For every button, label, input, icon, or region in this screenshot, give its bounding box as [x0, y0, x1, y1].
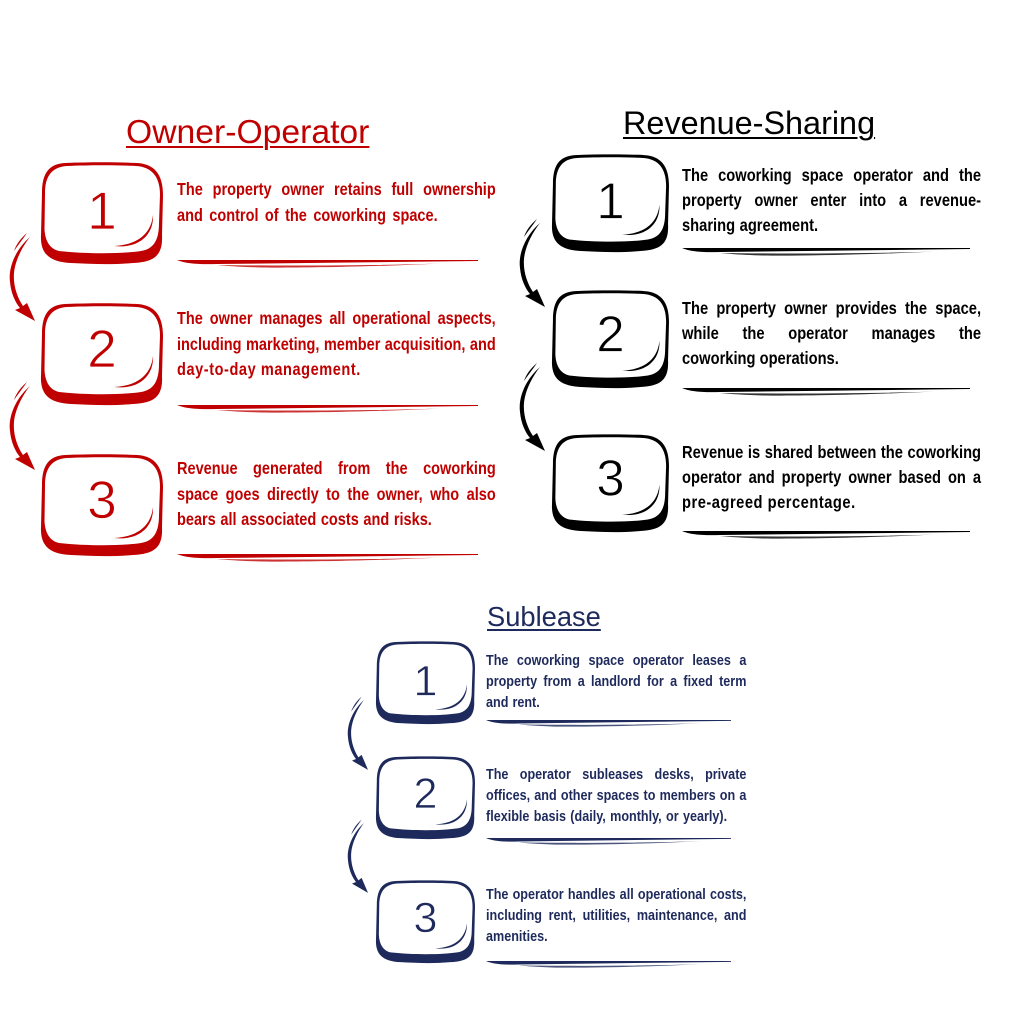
step 3: Sublease	[376, 880, 746, 968]
step 1: Owner-Operator	[40, 162, 496, 268]
text: step 2 description: flexible basis (daily, monthly, or yearly).	[486, 808, 727, 824]
icon: number badge 1: 1	[414, 658, 437, 706]
text: step 2 description	[486, 766, 746, 824]
arrow: step 1 to step 2	[348, 696, 368, 770]
arrow: step 2 to step 3	[364, 823, 380, 892]
text: step 3 description: space goes directly to the owner, who also	[177, 484, 496, 504]
text: step 3 description	[486, 884, 746, 946]
step 3: Owner-Operator	[40, 454, 496, 562]
text: step 3 description: operator and property owner based on a	[682, 466, 981, 486]
panel: Revenue-Sharing	[520, 105, 982, 539]
underline stroke	[682, 531, 970, 539]
underline stroke	[177, 405, 478, 413]
text: step 1 description: and control of the coworking space.	[177, 204, 438, 224]
text: step 2 description: while the operator manages the	[682, 322, 981, 342]
text: step 3 description	[682, 442, 982, 512]
icon: number badge 1: 1	[87, 182, 117, 241]
text: step 3 description: The operator handles all operational costs,	[486, 886, 746, 902]
step 2: Owner-Operator	[40, 303, 496, 413]
text: step 1 description: The property owner retains full ownership	[177, 179, 496, 199]
icon: number badge 1	[552, 154, 669, 252]
text: step 2 description: including marketing, member acquisition, and	[177, 334, 496, 354]
text: step 2 description	[682, 298, 981, 368]
text: step 2 description: The operator subleases desks, private	[486, 766, 746, 782]
text: step 1 description	[682, 164, 981, 234]
underline stroke	[177, 554, 478, 562]
icon: number badge 1: 1	[596, 172, 625, 229]
step 2: Sublease	[376, 756, 746, 845]
text: step 1 description: The coworking space operator leases a	[486, 652, 746, 668]
icon: number badge 1	[40, 162, 163, 264]
text: step 3 description: including rent, utilities, maintenance, and	[486, 906, 746, 924]
text: step 1 description	[177, 179, 496, 224]
icon: number badge 3	[40, 454, 163, 556]
text: step 1 description	[486, 652, 746, 710]
step 2: Revenue-Sharing	[552, 290, 981, 396]
underline stroke	[177, 260, 478, 268]
step 3: Revenue-Sharing	[552, 434, 982, 539]
arrow: step 1 to step 2	[10, 233, 35, 321]
text: step 3 description: pre-agreed percentage.	[682, 492, 856, 512]
heading: Sublease: Sublease	[487, 601, 601, 632]
text: step 3 description: Revenue generated from the coworking	[177, 458, 496, 478]
icon: number badge 3	[376, 880, 475, 964]
icon: number badge 3: 3	[596, 449, 625, 506]
underline stroke	[486, 838, 731, 845]
text: step 3 description: Revenue is shared between the coworking	[682, 442, 981, 462]
underline stroke	[682, 388, 970, 396]
arrow: step 2 to step 3	[520, 363, 545, 451]
text: step 1 description: sharing agreement.	[682, 214, 818, 234]
panel: Sublease	[348, 601, 746, 968]
icon: number badge 1	[376, 641, 475, 724]
arrow: step 1 to step 2	[520, 219, 545, 307]
text: step 3 description: bears all associated costs and risks.	[177, 509, 432, 529]
text: step 3 description: amenities.	[486, 928, 548, 944]
text: step 1 description: property owner enter into a revenue-	[682, 190, 981, 210]
icon: number badge 3: 3	[414, 894, 437, 942]
underline stroke	[682, 248, 970, 256]
text: step 2 description: coworking operations.	[682, 348, 839, 368]
icon: number badge 3	[552, 434, 669, 532]
icon: number badge 2	[40, 303, 163, 406]
text: step 1 description: property from a landlord for a fixed term	[486, 672, 746, 690]
arrow: step 2 to step 3	[10, 382, 35, 470]
icon: number badge 3: 3	[87, 471, 117, 530]
text: step 2 description: The owner manages all operational aspects,	[177, 308, 496, 328]
heading: Revenue-Sharing: Revenue-Sharing	[623, 105, 875, 141]
underline stroke	[486, 961, 731, 968]
text: step 1 description: and rent.	[486, 694, 540, 710]
panel: Owner-Operator	[10, 113, 496, 562]
icon: number badge 2: 2	[87, 320, 117, 379]
icon: number badge 2	[552, 290, 669, 388]
text: step 2 description: day-to-day management.	[177, 359, 361, 379]
text: step 2 description: The property owner provides the space,	[682, 298, 981, 318]
text: step 2 description: offices, and other spaces to members on a	[486, 786, 746, 804]
step 1: Revenue-Sharing	[552, 154, 981, 256]
underline stroke	[486, 720, 731, 727]
text: step 2 description	[177, 308, 496, 379]
icon: number badge 2	[376, 756, 475, 840]
heading: Owner-Operator: Owner-Operator	[126, 113, 369, 151]
step 1: Sublease	[376, 641, 746, 727]
icon: number badge 2: 2	[414, 770, 437, 818]
text: step 1 description: The coworking space operator and the	[682, 164, 981, 184]
icon: number badge 2: 2	[596, 305, 625, 362]
text: step 3 description	[177, 458, 496, 529]
